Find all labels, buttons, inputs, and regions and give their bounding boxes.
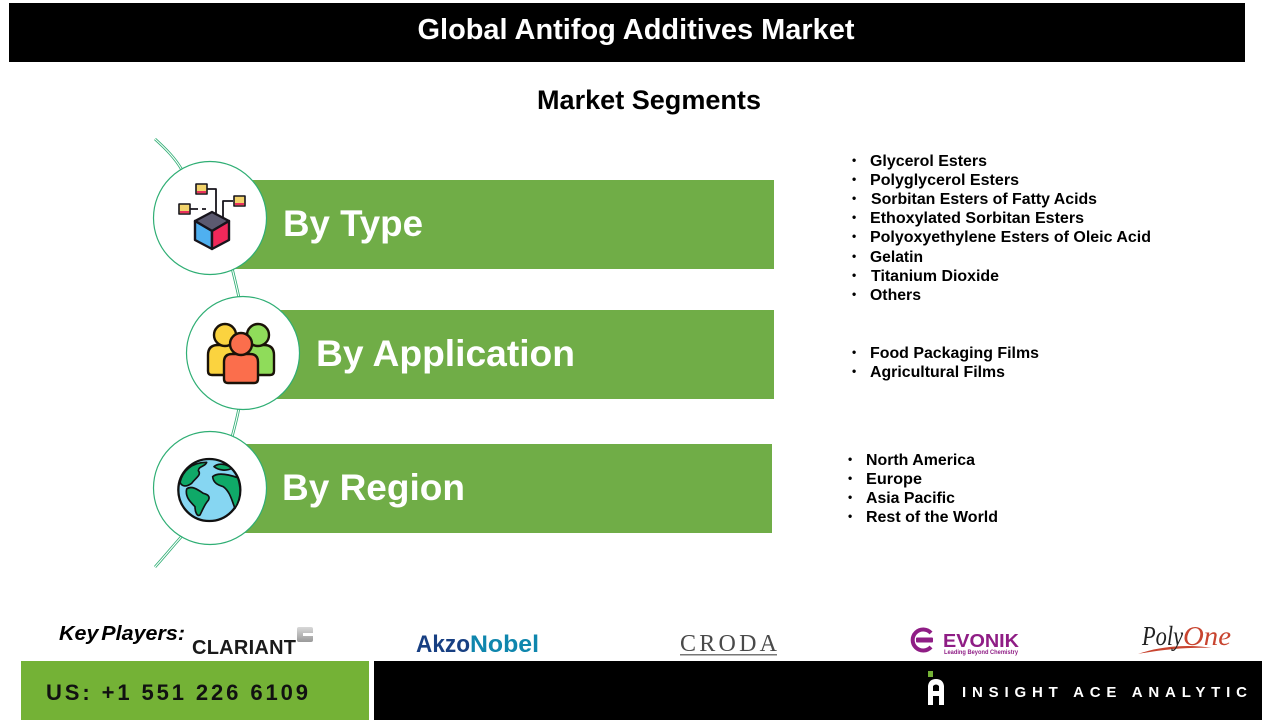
logo: clariant: [192, 627, 313, 659]
contact bar: [21, 661, 369, 720]
list: type segments: •: [852, 229, 856, 243]
list: application segments: •: [852, 364, 856, 378]
brand name: INSIGHT ACE ANALYTIC: [962, 684, 1247, 701]
list: type segments: •: [852, 191, 856, 205]
logo: evonik: [913, 630, 1019, 656]
panel: by application: [186, 296, 774, 410]
contact bar: US: +1 551 226 6109: [46, 680, 308, 705]
logo: akzonobel: [416, 631, 539, 658]
list: region segments: •: [848, 490, 852, 504]
list: type segments: Others: [870, 287, 921, 304]
list: type segments: Polyoxyethylene Esters of Oleic Acid: [870, 229, 1151, 246]
list: application segments: •: [852, 345, 856, 359]
list: type segments: Ethoxylated Sorbitan Esters: [870, 210, 1084, 227]
logo: polyone: One: [1183, 621, 1231, 651]
list: type segments: Polyglycerol Esters: [870, 172, 1019, 189]
icon: globe: [178, 459, 240, 521]
list: application segments: Agricultural Films: [870, 364, 1005, 381]
panel: by type: [154, 162, 774, 274]
label: by application: By Application: [316, 333, 575, 374]
list: region segments: •: [848, 452, 852, 466]
list: type segments: Gelatin: [870, 249, 923, 266]
list: region segments: Asia Pacific: [866, 490, 955, 507]
logo: akzonobel: Nobel: [470, 631, 539, 658]
title banner: [9, 3, 1245, 62]
list: type segments: •: [852, 287, 856, 301]
list: type segments: •: [852, 268, 856, 282]
brand bar: [374, 661, 1262, 720]
list: type segments: •: [852, 172, 856, 186]
logo: evonik: EVONIK: [943, 631, 1019, 651]
connector curve: [155, 139, 239, 567]
list: type segments: [852, 153, 1151, 304]
label: by type: By Type: [283, 203, 423, 244]
icon: people group: [208, 324, 274, 383]
list: type segments: Sorbitan Esters of Fatty Acids: [871, 191, 1097, 208]
list: region segments: Europe: [866, 471, 922, 488]
list: type segments: Glycerol Esters: [870, 153, 987, 170]
heading: market segments: Market Segments: [537, 85, 761, 115]
title banner: Global Antifog Additives Market: [418, 14, 855, 46]
list: type segments: •: [852, 153, 856, 167]
list: application segments: [852, 345, 1039, 381]
list: region segments: •: [848, 471, 852, 485]
logo: akzonobel: Akzo: [416, 631, 470, 658]
list: type segments: •: [852, 210, 856, 224]
logo: clariant: CLARIANT: [192, 637, 296, 659]
logo: croda: CRODA: [680, 631, 778, 657]
list: region segments: [848, 452, 998, 526]
logo: polyone: [1138, 621, 1231, 654]
list: type segments: •: [852, 249, 856, 263]
list: region segments: •: [848, 509, 852, 523]
icon: cube with nodes: [179, 184, 245, 249]
logo: polyone: Poly: [1141, 621, 1183, 651]
logo: evonik: Leading Beyond Chemistry: [944, 649, 1018, 656]
panel: by region: [154, 432, 772, 544]
heading: key players: Key Players:: [59, 622, 185, 645]
label: by region: By Region: [282, 467, 465, 508]
list: region segments: North America: [866, 452, 975, 469]
icon: insight ace logo: [928, 671, 944, 705]
list: region segments: Rest of the World: [866, 509, 998, 526]
list: type segments: Titanium Dioxide: [871, 268, 999, 285]
list: application segments: Food Packaging Films: [870, 345, 1039, 362]
